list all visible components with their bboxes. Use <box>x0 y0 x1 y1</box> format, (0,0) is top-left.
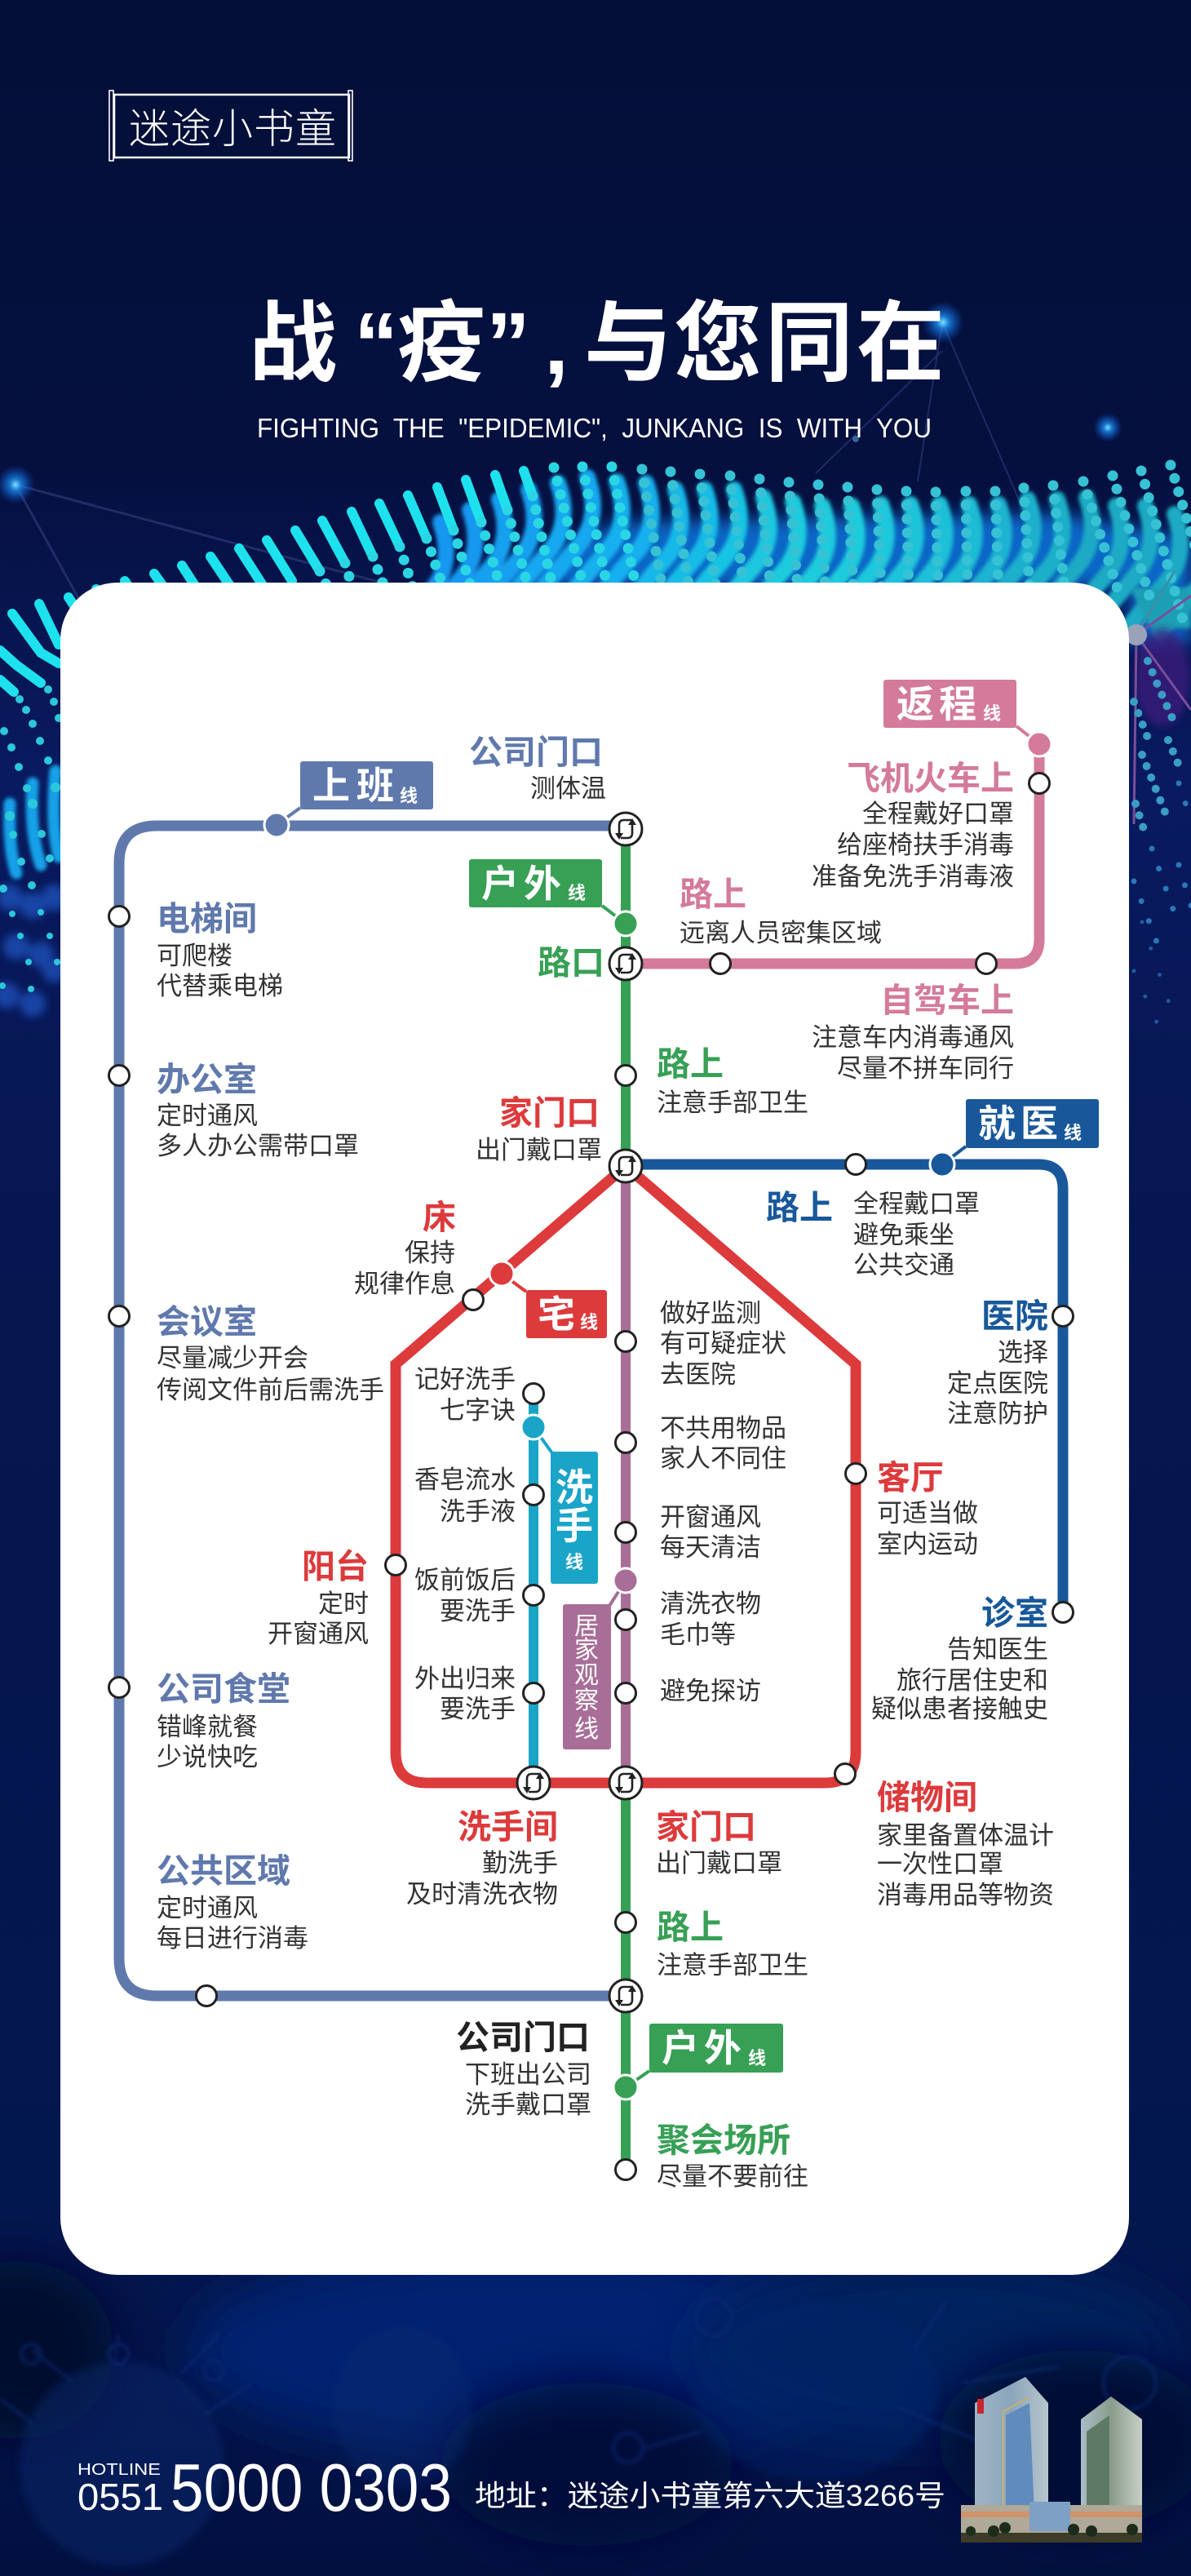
line tag: 返程线: 程 <box>939 683 976 725</box>
line tag: 居家观察线 <box>563 1568 638 1749</box>
background: left side dots <box>0 685 67 1017</box>
subtitle: FIGHTING THE "EPIDEMIC", JUNKANG IS WITH YOU <box>257 413 932 443</box>
labels: 就医线 stations: 公共交通 <box>853 1251 954 1279</box>
line: home observation (purple) <box>621 1166 631 1783</box>
line tag: 洗手线 <box>521 1415 598 1584</box>
labels: 户外线 stations: 聚会场所 <box>657 2122 790 2159</box>
labels: 上班线 stations <box>157 734 606 1953</box>
labels: 宅线 stations: 可适当做 <box>877 1499 978 1527</box>
labels: 户外线 stations: 尽量不要前往 <box>657 2162 808 2191</box>
labels: 就医线 stations: 医院 <box>981 1297 1048 1335</box>
labels: 返程线 stations: 注意车内消毒通风 <box>812 1023 1014 1052</box>
labels: 就医线 stations: 告知医生 <box>947 1635 1048 1664</box>
labels: 洗手线 stations: 记好洗手 <box>414 1365 516 1394</box>
line tag: 居家观察线: 家 <box>574 1637 599 1664</box>
labels: 宅线 stations: 洗手间 <box>458 1808 558 1846</box>
line tag: 居家观察线: 察 <box>574 1687 599 1714</box>
illustration: office towers <box>961 2377 1142 2543</box>
labels: 居家观察线 stations: 清洗衣物 <box>660 1589 761 1618</box>
labels: 户外线 stations: 注意手部卫生 <box>657 1088 808 1117</box>
labels: 居家观察线 stations: 家人不同住 <box>660 1444 786 1473</box>
labels: 宅线 stations: 出门戴口罩 <box>656 1849 782 1878</box>
footer: address: 地址：迷途小书童第六大道3266号 <box>475 2479 945 2512</box>
background: faint network lines <box>15 322 1060 620</box>
labels: 洗手线 stations <box>414 1365 516 1723</box>
labels: 上班线 stations: 尽量减少开会 <box>157 1344 308 1372</box>
labels: 宅线 stations: 开窗通风 <box>268 1620 369 1648</box>
labels: 宅线 stations: 勤洗手 <box>482 1849 558 1878</box>
labels: 就医线 stations: 避免乘坐 <box>853 1221 954 1249</box>
line tag: 居家观察线: 居 <box>574 1613 599 1640</box>
background: virus shapes <box>0 2244 1191 2566</box>
line tag: 洗手线: 线 <box>565 1552 583 1572</box>
labels: 居家观察线 stations: 做好监测 <box>660 1299 761 1328</box>
line tag: 居家观察线: 观 <box>574 1662 599 1689</box>
labels: 洗手线 stations: 要洗手 <box>440 1695 516 1723</box>
labels: 户外线 stations: 路上 <box>657 1909 724 1946</box>
line tag: 返程线: 线 <box>983 703 1001 724</box>
labels: 洗手线 stations: 外出归来 <box>414 1665 516 1693</box>
line tag: 就医线 <box>930 1099 1099 1177</box>
labels: 返程线 stations: 飞机火车上 <box>847 760 1014 797</box>
labels: 返程线 stations: 准备免洗手消毒液 <box>812 862 1014 891</box>
labels: 上班线 stations: 错峰就餐 <box>157 1713 258 1741</box>
line tag: 就医线: 医 <box>1021 1102 1058 1145</box>
labels: 就医线 stations: 选择 <box>998 1338 1048 1367</box>
panel: metro map card <box>60 583 1129 2275</box>
labels: 洗手线 stations: 七字诀 <box>440 1396 516 1425</box>
labels: 上班线 stations: 传阅文件前后需洗手 <box>157 1376 384 1404</box>
line tag: 宅线: 宅 <box>538 1293 575 1336</box>
labels: 洗手线 stations: 要洗手 <box>440 1597 516 1625</box>
labels: 上班线 stations: 定时通风 <box>157 1894 258 1922</box>
interchange icons <box>517 813 642 2012</box>
labels: 宅线 stations <box>268 1094 1054 1909</box>
labels: 宅线 stations: 消毒用品等物资 <box>877 1881 1054 1909</box>
labels: 居家观察线 stations: 避免探访 <box>660 1677 761 1705</box>
logo: 迷途小书童 <box>129 106 336 152</box>
line: return trip (pink) <box>626 744 1039 964</box>
labels: 就医线 stations: 疑似患者接触史 <box>871 1695 1048 1723</box>
line tag: 上班线: 班 <box>356 765 394 807</box>
line tag: 宅线 <box>489 1261 607 1338</box>
labels: 上班线 stations: 公司食堂 <box>157 1670 290 1708</box>
labels: 居家观察线 stations: 开窗通风 <box>660 1503 761 1532</box>
labels: 宅线 stations: 室内运动 <box>877 1530 978 1558</box>
labels: 返程线 stations: 全程戴好口罩 <box>862 800 1014 828</box>
line: outdoors (green) <box>621 829 631 2170</box>
labels: 宅线 stations: 床 <box>423 1199 456 1236</box>
labels: 上班线 stations: 测体温 <box>530 774 606 803</box>
labels: 上班线 stations: 公司门口 <box>469 734 603 771</box>
labels: 返程线 stations: 尽量不拼车同行 <box>837 1054 1014 1083</box>
background: glowing nodes <box>0 301 1122 504</box>
labels: 就医线 stations: 定点医院 <box>947 1369 1048 1398</box>
line tag: 户外线 top: 线 <box>568 883 586 903</box>
labels: 宅线 stations: 家里备置体温计 <box>877 1821 1054 1850</box>
logo <box>109 91 352 161</box>
line: home (red) <box>396 1166 856 1783</box>
labels: 宅线 stations: 客厅 <box>877 1459 944 1496</box>
labels: 洗手线 stations: 香皂流水 <box>414 1465 516 1494</box>
labels: 返程线 stations: 自驾车上 <box>880 982 1014 1019</box>
line tag: 上班线: 线 <box>400 786 418 806</box>
labels: 上班线 stations: 可爬楼 <box>157 942 232 970</box>
labels: 宅线 stations: 阳台 <box>302 1548 369 1585</box>
labels: 宅线 stations: 及时清洗衣物 <box>406 1880 558 1909</box>
labels: 上班线 stations: 公共区域 <box>157 1852 290 1890</box>
line tag: 居家观察线: 线 <box>574 1716 599 1743</box>
labels: 就医线 stations: 注意防护 <box>947 1399 1048 1428</box>
footer: hotline: 5000 0303 <box>170 2450 452 2525</box>
labels: 宅线 stations: 出门戴口罩 <box>476 1136 602 1164</box>
labels: 居家观察线 stations <box>660 1299 786 1705</box>
labels: 宅线 stations: 定时 <box>318 1589 369 1618</box>
line tag: 就医线: 线 <box>1064 1123 1082 1143</box>
labels: 宅线 stations: 规律作息 <box>354 1270 455 1298</box>
title: 战“疫”,与您同在 <box>249 294 945 392</box>
stations <box>109 774 1074 2180</box>
line: hand washing (cyan) <box>529 1394 538 1783</box>
labels: 返程线 stations: 路上 <box>680 876 746 913</box>
labels: 上班线 stations: 定时通风 <box>157 1102 258 1130</box>
background: dotted wave <box>0 465 1191 692</box>
labels: 就医线 stations <box>766 1189 1048 1723</box>
line tag: 户外线 top: 外 <box>524 862 561 905</box>
line tag: 上班线: 上 <box>312 765 350 807</box>
line tag: 洗手线: 手 <box>556 1505 593 1547</box>
labels: 上班线 stations: 办公室 <box>157 1061 257 1098</box>
line: work commute (blue) <box>119 826 626 1996</box>
labels: 宅线 stations: 家门口 <box>656 1808 756 1846</box>
line tag: 上班线 <box>264 761 433 837</box>
footer: hotline: 0551 <box>77 2476 163 2518</box>
labels: 居家观察线 stations: 每天清洁 <box>660 1533 761 1562</box>
labels: 返程线 stations <box>680 760 1014 1083</box>
labels: 宅线 stations: 家门口 <box>499 1094 600 1132</box>
labels: 户外线 stations: 下班出公司 <box>465 2060 591 2089</box>
labels: 上班线 stations: 会议室 <box>157 1303 257 1341</box>
labels: 上班线 stations: 电梯间 <box>157 900 257 938</box>
labels: 就医线 stations: 旅行居住史和 <box>897 1666 1048 1695</box>
labels: 就医线 stations: 全程戴口罩 <box>853 1190 980 1218</box>
labels: 返程线 stations: 给座椅扶手消毒 <box>837 831 1014 859</box>
labels: 洗手线 stations: 饭前饭后 <box>414 1566 516 1594</box>
labels: 宅线 stations: 一次性口罩 <box>877 1850 1003 1878</box>
labels: 返程线 stations: 远离人员密集区域 <box>680 919 882 947</box>
labels: 户外线 stations: 注意手部卫生 <box>657 1951 808 1980</box>
line tag: 户外线 top <box>469 859 638 936</box>
line tag: 宅线: 线 <box>580 1312 598 1332</box>
labels: 户外线 stations: 路口 <box>538 944 604 982</box>
line tag: 返程线: 返 <box>897 683 934 725</box>
labels: 居家观察线 stations: 去医院 <box>660 1360 736 1389</box>
labels: 宅线 stations: 保持 <box>405 1239 455 1267</box>
labels: 居家观察线 stations: 有可疑症状 <box>660 1329 786 1358</box>
labels: 上班线 stations: 代替乘电梯 <box>157 972 283 1000</box>
labels: 上班线 stations: 多人办公需带口罩 <box>157 1132 359 1160</box>
line tag: 户外线 bottom <box>613 2024 783 2099</box>
labels: 户外线 stations: 路上 <box>657 1045 724 1083</box>
labels: 宅线 stations: 储物间 <box>877 1779 977 1816</box>
line tag: 返程线 <box>883 680 1052 756</box>
labels: 洗手线 stations: 洗手液 <box>440 1497 516 1526</box>
labels: 户外线 stations: 公司门口 <box>456 2019 590 2056</box>
labels: 居家观察线 stations: 毛巾等 <box>660 1621 736 1649</box>
line tag: 洗手线: 洗 <box>556 1466 593 1509</box>
line tag: 户外线 bottom: 户 <box>662 2027 699 2069</box>
labels: 就医线 stations: 路上 <box>766 1189 833 1226</box>
line tag: 户外线 bottom: 线 <box>748 2048 766 2068</box>
footer: hotline <box>77 2450 452 2525</box>
line tag: 就医线: 就 <box>978 1102 1016 1145</box>
labels: 户外线 stations <box>456 944 808 2191</box>
line tag: 户外线 top: 户 <box>481 862 519 905</box>
background: right side dots and node <box>1126 571 1191 1044</box>
footer: hotline: HOTLINE <box>77 2461 161 2479</box>
labels: 上班线 stations: 少说快吃 <box>157 1743 258 1771</box>
line tag: 户外线 bottom: 外 <box>704 2027 742 2069</box>
labels: 上班线 stations: 每日进行消毒 <box>157 1924 308 1953</box>
labels: 户外线 stations: 洗手戴口罩 <box>465 2091 591 2119</box>
labels: 居家观察线 stations: 不共用物品 <box>660 1414 786 1443</box>
line: hospital visit (dark blue) <box>626 1164 1063 1612</box>
labels: 就医线 stations: 诊室 <box>981 1594 1048 1632</box>
